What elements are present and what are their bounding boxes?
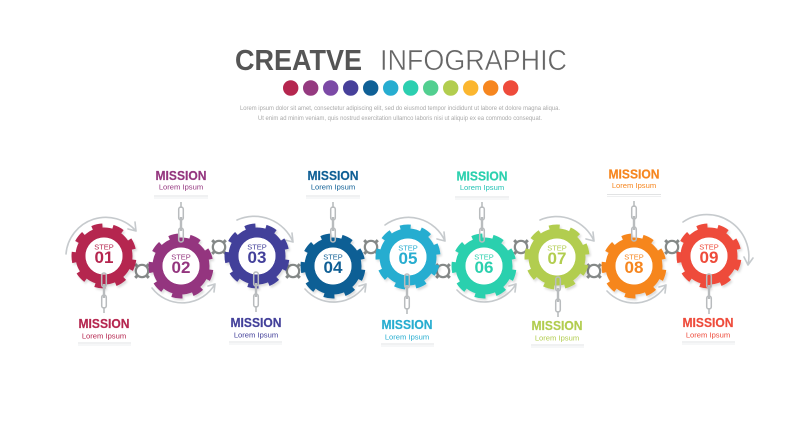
connector 7-8 — [587, 264, 601, 278]
chain: step 07 — [556, 277, 560, 317]
gear: step 04: STEP — [323, 252, 343, 261]
arrow: step 8 — [607, 285, 666, 303]
gear: step 03 — [218, 217, 296, 295]
label: step 01 — [78, 316, 131, 345]
arrow: step 3 — [237, 216, 293, 242]
gear: step 09: STEP — [699, 242, 719, 251]
label: step 05: Lorem Ipsum — [385, 332, 429, 342]
gear: step 01: 01 — [95, 248, 113, 267]
chain: step 03 — [254, 272, 258, 312]
label: step 07 — [531, 318, 584, 347]
chain: step 01 — [102, 273, 106, 313]
chain: step 08 — [632, 201, 636, 241]
label: step 04: MISSION — [308, 168, 358, 183]
gear: step 03: 03 — [248, 248, 266, 267]
label: step 09: MISSION — [682, 315, 734, 330]
gear: step 06: STEP — [474, 252, 494, 261]
gear: step 07: STEP — [547, 243, 567, 252]
chain: step 04 — [331, 202, 335, 242]
gear: step 04: 04 — [324, 258, 343, 277]
label: step 08 — [607, 166, 661, 196]
gear: step 08 — [595, 227, 673, 305]
label: step 08: Lorem Ipsum — [612, 181, 656, 190]
label: step 02: MISSION — [156, 168, 206, 183]
gear: step 02: STEP — [171, 252, 191, 261]
colour dots row — [283, 80, 518, 96]
gear: step 07: 07 — [548, 249, 566, 268]
arrow: step 6 — [457, 284, 516, 302]
label: step 06 — [455, 168, 509, 199]
label: step 06: Lorem Ipsum — [460, 183, 504, 192]
label: step 02 — [154, 168, 208, 198]
label: step 07: MISSION — [532, 318, 582, 333]
connector 3-4 — [286, 264, 300, 278]
label: step 03 — [229, 315, 282, 344]
gear: step 09: 09 — [700, 248, 718, 267]
gear: step 03: STEP — [247, 242, 267, 251]
intro text: Ut enim ad minim veniam, quis nostrud exercitation ullamco laboris nisi ut aliquip ex ea commodo consequat. — [258, 115, 542, 122]
arrow: step 2 — [152, 284, 215, 303]
connector 8-9 — [665, 240, 679, 254]
arrow: step 9 — [683, 215, 753, 265]
gear: step 05 — [371, 220, 445, 294]
label: step 01: MISSION — [78, 316, 130, 331]
label: step 03: MISSION — [230, 315, 282, 330]
label: step 08: MISSION — [608, 166, 660, 182]
label: step 05 — [381, 317, 434, 346]
chain: step 06 — [480, 202, 484, 242]
title — [235, 45, 567, 77]
connector 4-5 — [364, 240, 378, 254]
connector 5-6 — [436, 264, 450, 278]
chain: step 09 — [707, 274, 711, 314]
arrow: step 5 — [385, 217, 445, 241]
connector 6-7 — [514, 240, 528, 254]
chain: step 02 — [179, 202, 183, 242]
intro text — [240, 105, 560, 122]
label: step 06: MISSION — [456, 168, 508, 184]
gear: step 07 — [520, 220, 594, 294]
label: step 03: Lorem Ipsum — [234, 330, 278, 340]
gear: step 05: 05 — [399, 249, 417, 268]
label: step 09: Lorem Ipsum — [686, 330, 730, 340]
title: INFOGRAPHIC — [380, 45, 567, 77]
label: step 05: MISSION — [382, 317, 432, 332]
gear: step 02: 02 — [172, 258, 190, 277]
label: step 02: Lorem Ipsum — [159, 182, 203, 192]
title: CREATVE — [235, 45, 362, 77]
gear: step 01 — [65, 217, 143, 295]
connector 1-2 — [135, 264, 149, 278]
label: step 01: Lorem Ipsum — [82, 332, 126, 340]
gear: step 05: STEP — [398, 243, 418, 252]
label: step 04 — [306, 168, 360, 198]
gear: step 09 — [670, 217, 748, 295]
gear: step 06: 06 — [475, 258, 493, 277]
arrow: step 7 — [540, 217, 594, 241]
label: step 04: Lorem Ipsum — [311, 182, 355, 192]
gear: step 08: 08 — [625, 258, 643, 277]
arrow: step 4 — [305, 284, 366, 302]
gear: step 06 — [445, 227, 523, 305]
gear: step 02 — [142, 227, 220, 305]
arrow: step 1 — [66, 217, 136, 254]
label: step 07: Lorem Ipsum — [535, 334, 579, 342]
gear: step 01: STEP — [94, 242, 114, 251]
intro text: Lorem ipsum dolor sit amet, consectetur adipiscing elit, sed do eiusmod tempor incididunt ut labore et dolore magna aliqua. — [240, 105, 560, 112]
gear: step 08: STEP — [624, 252, 644, 261]
gear: step 04 — [294, 227, 372, 305]
connector 2-3 — [212, 240, 226, 254]
label: step 09 — [682, 315, 735, 344]
chain: step 05 — [405, 274, 409, 314]
